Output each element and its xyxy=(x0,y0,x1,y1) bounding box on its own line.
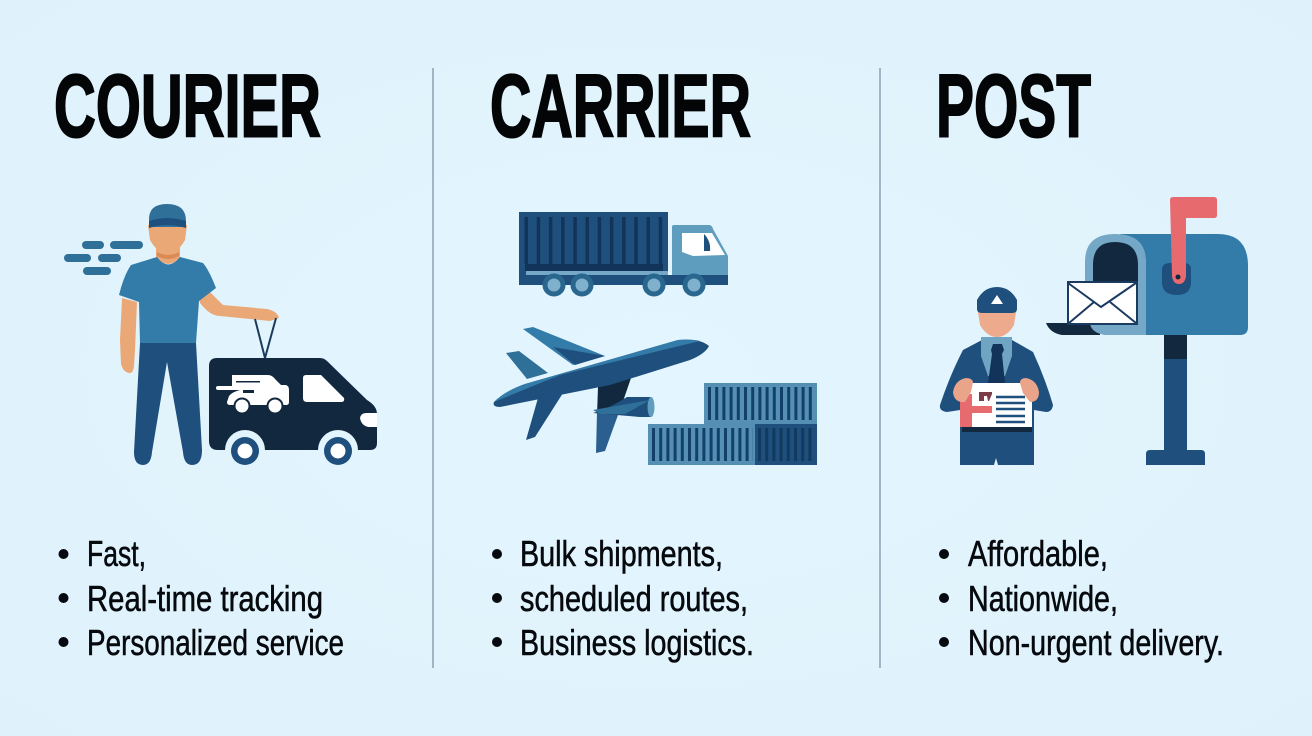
icon: airplane xyxy=(494,327,709,453)
list: courier bullets xyxy=(58,533,344,663)
panel: carrier xyxy=(490,56,817,663)
icon: letter held by worker xyxy=(960,383,1032,427)
list: courier bullets: Fast, xyxy=(87,533,146,574)
panel: post xyxy=(936,56,1248,663)
list: courier bullets: Real-time tracking xyxy=(87,578,323,619)
list: carrier bullets: Bulk shipments, xyxy=(520,533,723,574)
list: carrier bullets: scheduled routes, xyxy=(520,578,748,619)
icon: mailbox xyxy=(1046,197,1248,465)
list: post bullets: Affordable, xyxy=(968,533,1108,574)
icon: speed lines xyxy=(64,241,143,275)
icon: containers xyxy=(648,383,817,465)
list: post bullets xyxy=(939,533,1224,663)
icon: van logo xyxy=(216,375,289,414)
icon: courier person xyxy=(119,204,279,465)
list: post bullets: Nationwide, xyxy=(968,578,1118,619)
list: carrier bullets: Business logistics. xyxy=(520,622,754,663)
heading: courier: COURIER xyxy=(54,56,321,156)
icon: postal worker xyxy=(940,287,1053,465)
heading: carrier: CARRIER xyxy=(490,56,751,156)
icon: delivery van xyxy=(209,358,377,465)
panel: courier xyxy=(54,56,377,663)
icon: truck xyxy=(519,212,728,294)
list: courier bullets: Personalized service xyxy=(87,622,344,663)
heading: post: POST xyxy=(936,56,1091,156)
list: carrier bullets xyxy=(492,533,754,663)
list: post bullets: Non-urgent delivery. xyxy=(968,622,1224,663)
